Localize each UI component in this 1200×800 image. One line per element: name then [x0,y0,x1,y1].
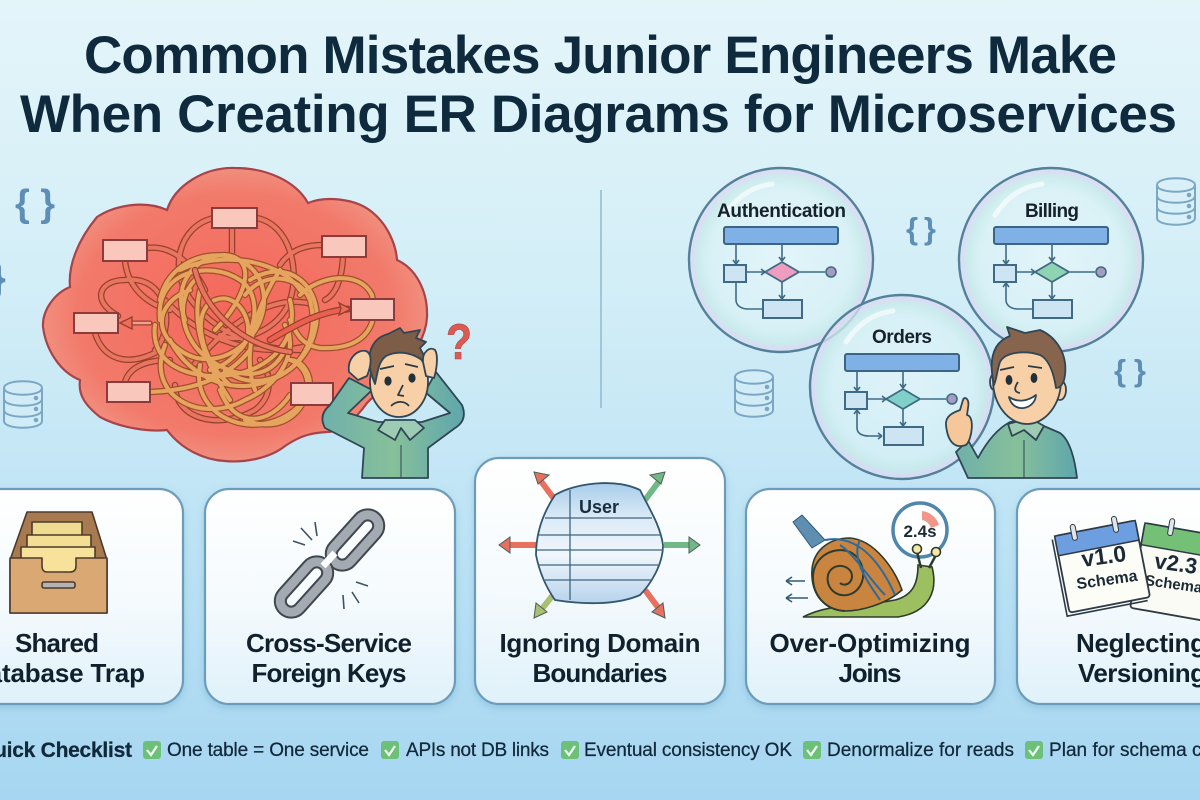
label: Boundaries [532,658,668,688]
panel: neglecting versioning [1017,489,1200,704]
item: denormalize: Denormalize for reads [827,740,1014,761]
label [770,628,970,688]
table name: User [579,497,619,517]
panel: tangled shared schema cloud [43,168,427,461]
icon: question mark: ? [446,314,472,370]
shirt and raised arms [322,372,464,478]
icon: curly braces centre: { } [906,211,936,246]
face [993,336,1061,424]
panel: shared database trap [0,489,183,704]
panel: billing bubble [959,168,1143,352]
icon: curly braces left: { } [15,183,55,225]
icon: arrows pointing outward [508,480,692,610]
eye stalks [917,552,936,568]
character: confused engineer [322,328,464,478]
tangled join lines [793,515,825,548]
icon: database right [1157,178,1195,225]
panel: cross-service foreign keys [205,489,455,704]
label: Joins [838,658,902,688]
arrowheads [120,303,351,329]
icon: v2.3 calendar [1130,514,1200,623]
thumbs-up hand [946,398,972,446]
character: happy engineer [946,327,1077,478]
v1.0 text [1075,540,1139,593]
collar [1008,418,1044,440]
panel: authentication bubble [689,168,873,352]
icon: database left [4,381,42,428]
panel: orders bubble [810,295,994,479]
worried face features [380,364,418,406]
label [0,628,145,688]
right ear [1054,380,1066,400]
label [500,628,700,688]
icon: database centre [735,370,773,417]
panel: over-optimizing joins [746,489,995,704]
divider [600,190,602,408]
title: When Creating ER Diagrams for Microservices [20,85,1177,144]
icon: file drawer [10,512,107,613]
icon: motion arrows [786,577,808,602]
left ear [990,374,998,390]
icon: v1.0 calendar [1050,513,1151,616]
shell [812,538,902,611]
panel: ignoring domain boundaries [475,458,725,704]
entity boxes [74,208,394,405]
smiling face features [1000,366,1042,393]
v2.3 text [1144,548,1200,597]
flow diagram [994,227,1108,318]
icon: stopwatch [893,503,947,557]
icon: stopwatch: 2.4s [903,522,937,541]
v1.0 text: Schema [1075,568,1139,593]
cloud shape [43,168,427,461]
label: Over-Optimizing [770,628,970,658]
hair [992,327,1065,388]
label: Foreign Keys [252,658,406,688]
shirt and arm [956,420,1077,478]
title [20,26,1177,144]
label: Authentication [717,201,846,222]
v2.3 text: v2.3 [1153,548,1199,579]
item: eventual consistency: Eventual consistency OK [584,740,792,761]
item: APIs not DB links: APIs not DB links [406,740,549,761]
flow diagram [845,354,959,445]
checklist bar [0,739,1200,762]
icon: snail [793,515,940,617]
icon: curly braces right: { } [1114,353,1146,388]
title: Common Mistakes Junior Engineers Make [84,26,1117,85]
icon: bloated user table [536,483,663,603]
snail body [803,565,934,617]
v1.0 text: v1.0 [1080,540,1128,572]
face [370,347,428,417]
collar and buttons [378,420,424,440]
label [246,628,412,688]
flow diagram [724,227,838,318]
label: Orders [872,327,932,348]
label: Shared [15,628,99,658]
shell spiral [813,550,863,611]
label: Ignoring Domain [500,628,700,658]
label [1076,628,1200,688]
label: Cross-Service [246,628,412,658]
hands [349,351,371,380]
icon: broken chain [276,510,383,617]
label: Billing [1025,201,1079,222]
item: one table one service: One table = One service [167,740,369,761]
hair [369,328,427,384]
tangled relationship lines [95,218,374,425]
